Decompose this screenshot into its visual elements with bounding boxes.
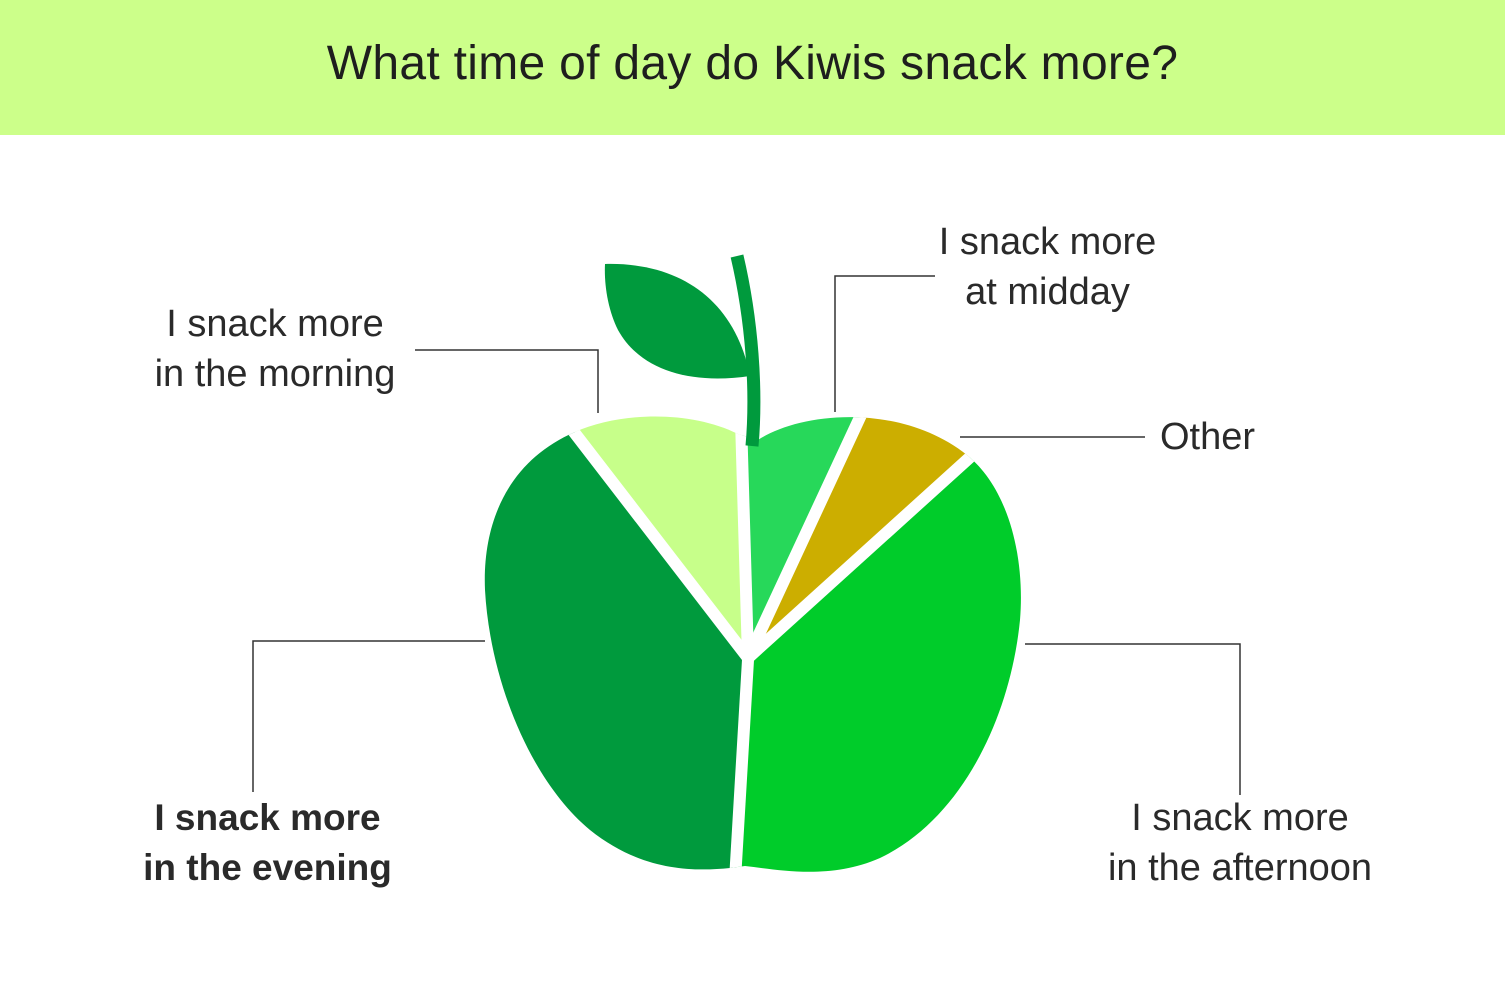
label: evening: in the evening xyxy=(143,847,392,888)
label: evening xyxy=(143,797,392,888)
label: morning xyxy=(155,303,395,395)
segment: evening xyxy=(484,432,742,870)
label: midday: I snack more xyxy=(939,221,1156,263)
segment: afternoon xyxy=(736,457,1021,872)
label: afternoon: in the afternoon xyxy=(1108,847,1372,889)
title: What time of day do Kiwis snack more? xyxy=(327,37,1178,90)
label: evening: I snack more xyxy=(154,797,381,838)
label: midday xyxy=(939,221,1156,313)
label: morning: I snack more xyxy=(166,303,384,345)
leader lines xyxy=(253,276,1240,795)
segment: other xyxy=(766,417,970,634)
segment: midday xyxy=(742,417,860,633)
header xyxy=(0,0,1505,135)
segment: morning xyxy=(575,416,742,640)
chart: apple xyxy=(252,254,1241,872)
label: morning: in the morning xyxy=(155,353,395,395)
label: afternoon: I snack more xyxy=(1131,797,1349,839)
label: midday: at midday xyxy=(965,271,1130,313)
label: afternoon xyxy=(1108,797,1372,889)
label: other: Other xyxy=(1160,416,1255,458)
icon: stem xyxy=(737,256,754,446)
icon: leaf xyxy=(605,264,750,379)
